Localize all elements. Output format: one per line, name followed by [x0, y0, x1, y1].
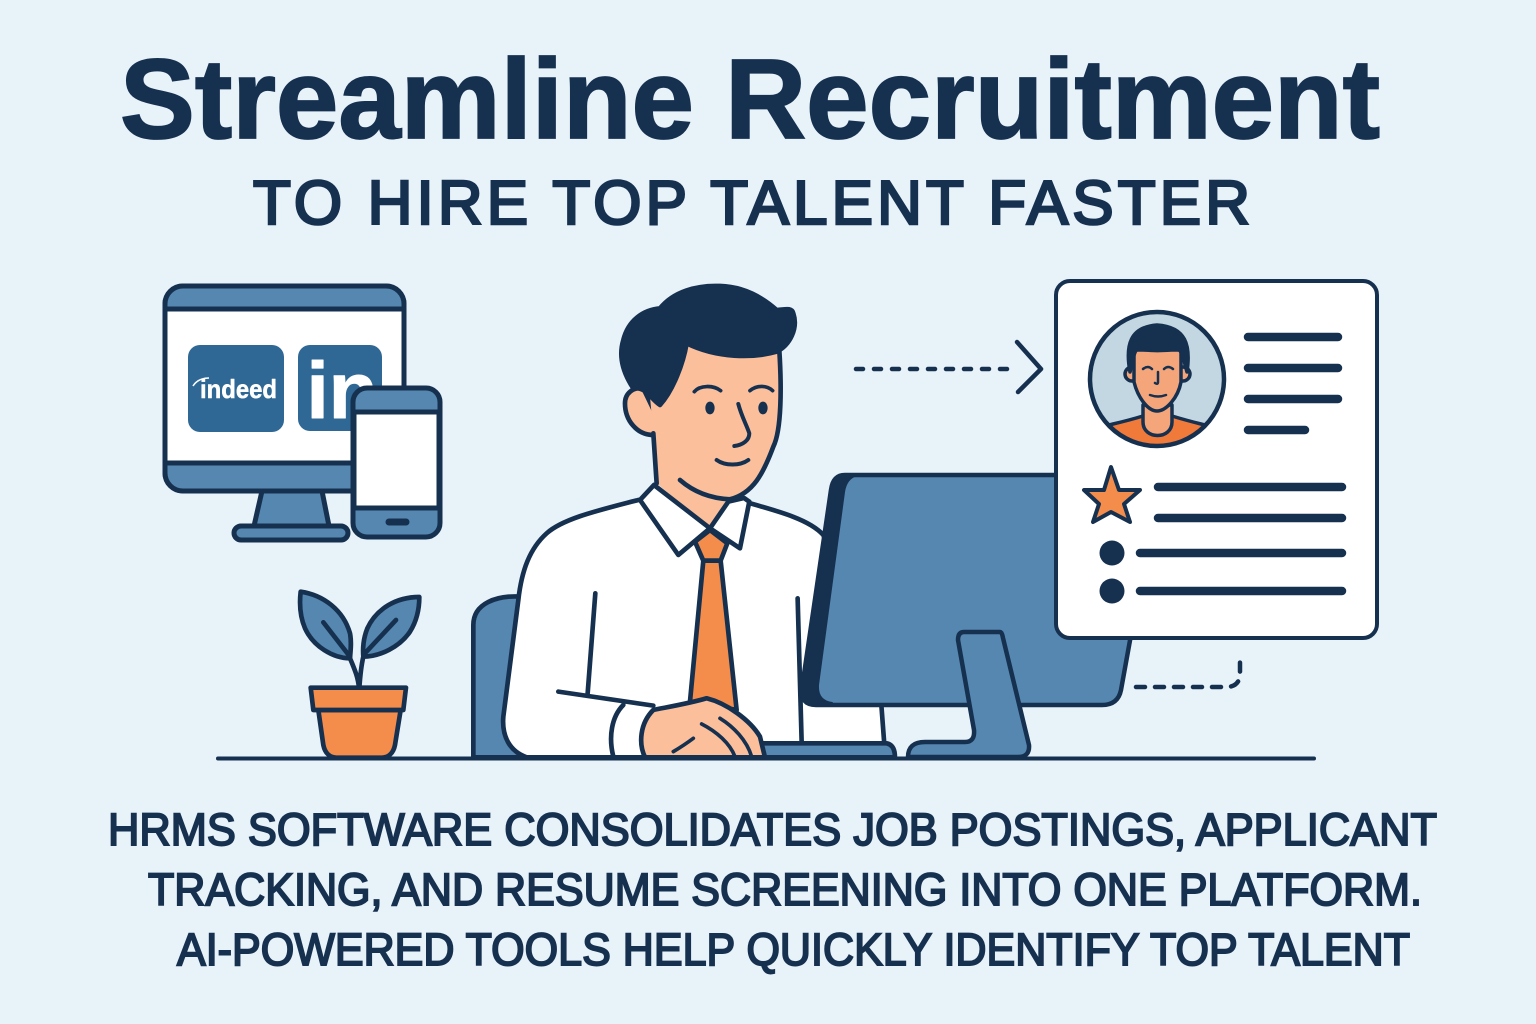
star rating icon [1084, 467, 1140, 522]
hair [621, 286, 795, 405]
line 1: HRMS SOFTWARE CONSOLIDATES JOB POSTINGS, APPLICANT [108, 804, 1437, 855]
face [650, 330, 781, 528]
hand [641, 698, 765, 757]
left leaf [300, 592, 351, 658]
eyes [708, 404, 712, 412]
desk line [218, 756, 1314, 760]
phone [353, 388, 440, 537]
chair [473, 596, 533, 757]
tie knot [695, 530, 727, 561]
mouth [717, 460, 748, 464]
nose [734, 404, 749, 446]
monitor stand [254, 491, 329, 526]
panel: candidate resume card [1056, 281, 1377, 638]
collar right [710, 498, 749, 548]
large desktop monitor [802, 475, 1160, 757]
plant stems [350, 657, 363, 688]
bullet dots [1100, 540, 1124, 604]
ear [625, 388, 663, 435]
eyebrows [694, 386, 773, 392]
profile detail lines [1248, 337, 1338, 430]
dashed connector [1136, 658, 1240, 687]
indeed logo tile [188, 345, 284, 432]
illustration: recruiter at desk [473, 286, 895, 757]
right leaf [363, 597, 419, 657]
icon: desktop monitor with job boards and phone [165, 286, 440, 540]
shirt [503, 500, 885, 757]
shirt fold lines [588, 593, 802, 742]
collar left [640, 485, 710, 555]
pot rim [311, 688, 406, 710]
sleeve line and cuff [558, 692, 653, 757]
skill lines [1140, 487, 1342, 591]
body text [108, 804, 1437, 975]
monitor dark side edge [802, 475, 857, 703]
card background [1056, 281, 1377, 638]
monitor screen back [802, 475, 1160, 705]
keyboard [677, 743, 895, 757]
title: Streamline Recruitment [120, 36, 1380, 162]
line 3: AI-POWERED TOOLS HELP QUICKLY IDENTIFY TOP TALENT [177, 924, 1410, 975]
monitor stand [908, 632, 1029, 757]
avatar portrait [1090, 312, 1225, 450]
fingers [673, 718, 752, 757]
subtitle: TO HIRE TOP TALENT FASTER [253, 169, 1250, 238]
LinkedIn logo tile: in [306, 346, 378, 435]
monitor body [165, 286, 404, 491]
dashed arrow to resume [856, 342, 1041, 392]
tie [690, 561, 737, 710]
pot body [318, 710, 401, 758]
line 2: TRACKING, AND RESUME SCREENING INTO ONE PLATFORM. [148, 864, 1422, 915]
monitor base [234, 526, 348, 540]
face outline [653, 350, 781, 499]
icon: potted plant [300, 592, 419, 758]
indeed logo tile: indeed [200, 374, 277, 404]
leaf veins [323, 620, 396, 657]
